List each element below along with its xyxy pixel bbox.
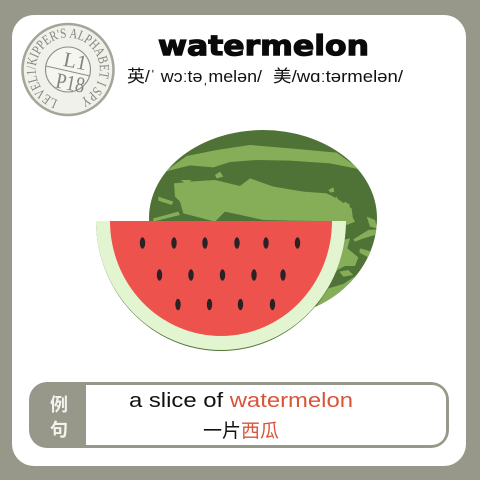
melon slice	[96, 221, 346, 351]
slice outer rind shadow	[96, 221, 346, 351]
label 例句: 例	[50, 395, 68, 415]
label 例句: 句	[50, 420, 68, 440]
panel white area	[86, 385, 446, 445]
label 例句	[50, 395, 68, 440]
example sentence panel	[29, 382, 449, 448]
stamp L1: L1	[62, 47, 89, 75]
Chinese sentence: 一片西瓜	[203, 420, 279, 442]
whole melon	[149, 130, 377, 308]
stamp P18: P18	[54, 68, 87, 98]
seeds	[140, 237, 300, 310]
stamp badge	[21, 22, 115, 116]
title: watermelon	[158, 29, 369, 62]
slice rind	[96, 221, 346, 350]
slice flesh	[110, 221, 332, 336]
phonetics: 美/wɑːtərmelən/	[273, 67, 403, 86]
English sentence: a slice of watermelon	[129, 390, 353, 412]
panel frame	[29, 382, 449, 448]
phonetics	[127, 67, 403, 86]
phonetics: 英/ˈ wɔːtəˌmelən/	[127, 67, 262, 86]
illustration: watermelon	[96, 125, 385, 351]
stamp ring text: LEVEL1/KIPPER'S ALPHABET I SPY	[26, 28, 110, 108]
